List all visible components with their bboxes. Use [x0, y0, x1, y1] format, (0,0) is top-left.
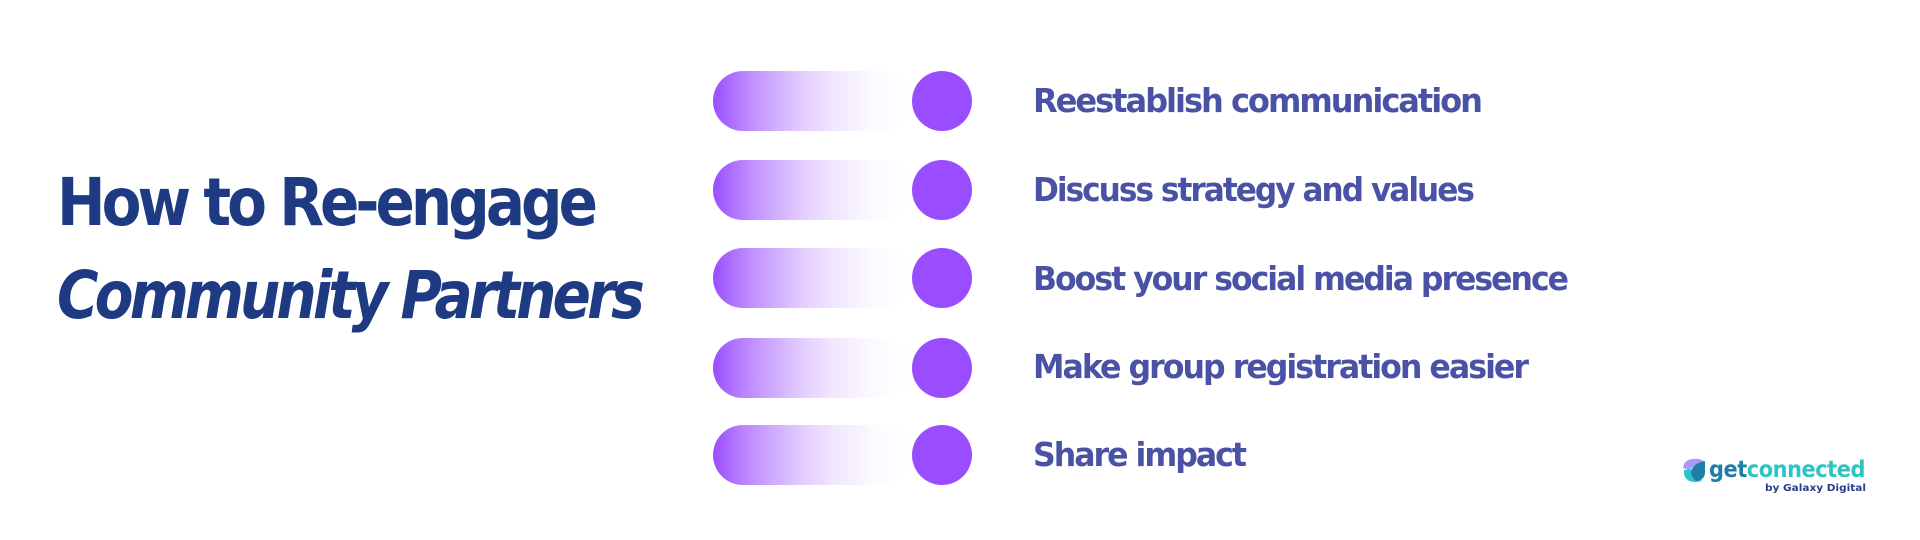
label 5: Share impact	[1033, 435, 1247, 474]
list item 5: share impact	[713, 425, 1247, 485]
gradient pill 5	[713, 425, 913, 485]
label 2: Discuss strategy and values	[1033, 170, 1474, 209]
list item 2: discuss strategy and values	[713, 160, 1474, 220]
circle marker 5	[912, 425, 972, 485]
icon: logo mark	[1683, 459, 1705, 482]
gradient pill 4	[713, 338, 913, 398]
circle marker 4	[912, 338, 972, 398]
label 4: Make group registration easier	[1033, 347, 1530, 386]
title: How to Re-engage	[57, 164, 596, 241]
circle marker 1	[912, 71, 972, 131]
logo wordmark: getconnected	[1709, 457, 1865, 483]
title: Community Partners	[57, 257, 643, 334]
title	[57, 164, 643, 334]
circle marker 2	[912, 160, 972, 220]
list item 3: boost your social media presence	[713, 248, 1568, 308]
list item 4: make group registration easier	[713, 338, 1530, 398]
circle marker 3	[912, 248, 972, 308]
logo tagline: by Galaxy Digital	[1765, 483, 1866, 494]
gradient pill 1	[713, 71, 913, 131]
list item 1: reestablish communication	[713, 71, 1481, 131]
gradient pill 2	[713, 160, 913, 220]
label 1: Reestablish communication	[1033, 81, 1481, 120]
logo: getconnected by Galaxy Digital	[1683, 457, 1866, 494]
gradient pill 3	[713, 248, 913, 308]
label 3: Boost your social media presence	[1033, 259, 1568, 298]
